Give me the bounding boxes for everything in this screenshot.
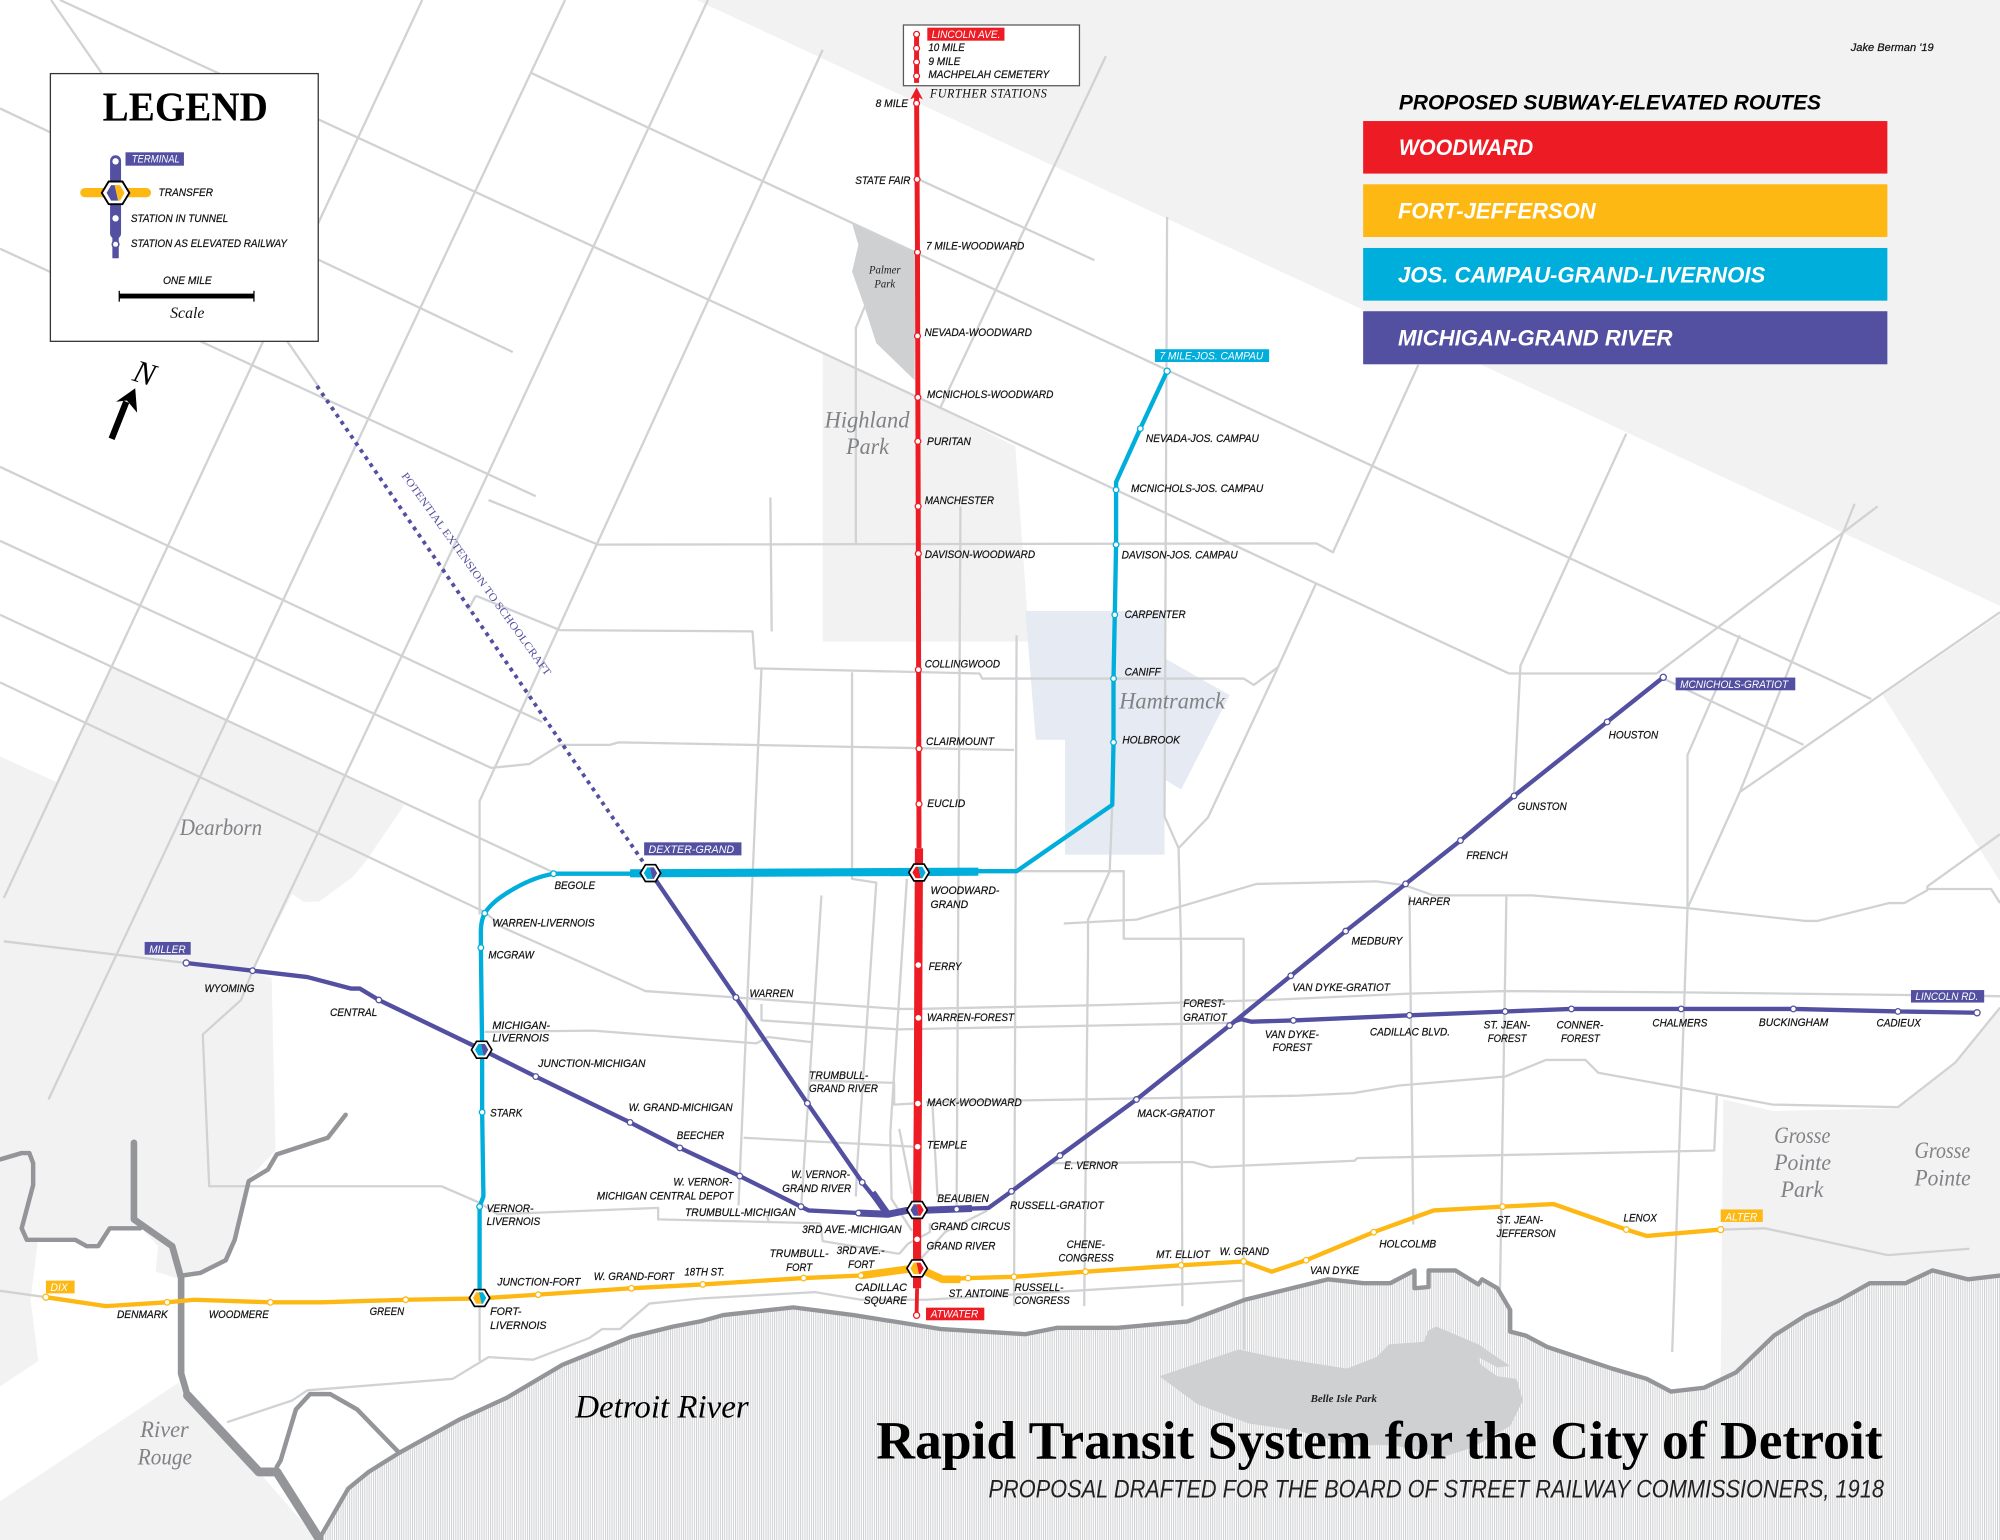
route key: Michigan-Grand River: [1363, 311, 1887, 364]
label: Russell-Congress: CONGRESS: [1015, 1295, 1070, 1307]
label: Conner-Forest: FOREST: [1561, 1033, 1601, 1045]
label: Medbury: MEDBURY: [1352, 936, 1404, 948]
label: 3rd Ave.-Fort: 3RD AVE.-: [837, 1245, 885, 1257]
label: Van Dyke-Forest: FOREST: [1273, 1042, 1312, 1054]
label: Harper: HARPER: [1408, 896, 1450, 908]
inset: further Woodward stations: MACHPELAH CEMETERY: [928, 69, 1050, 81]
label: McNichols-Woodward: MCNICHOLS-WOODWARD: [927, 389, 1053, 401]
legend text: transfer: TRANSFER: [159, 187, 213, 199]
inset: further Woodward stations: 10 MILE: [928, 42, 965, 54]
region: outside city to the northeast: [696, 0, 2000, 606]
tag: McNichols-Gratiot: MCNICHOLS-GRATIOT: [1680, 679, 1789, 691]
label: Cadillac Square: SQUARE: [864, 1295, 907, 1307]
legend text: station as elevated railway: STATION AS ELEVATED RAILWAY: [131, 238, 288, 250]
label: Van Dyke-Forest: [1265, 1029, 1319, 1054]
label: Central: CENTRAL: [330, 1007, 377, 1019]
inset: further Woodward stations: 9 MILE: [928, 56, 961, 68]
legend symbol: sample lines and transfer: [85, 158, 146, 258]
label: Stark: STARK: [490, 1108, 523, 1120]
label: Chene-Congress: [1059, 1239, 1114, 1265]
label: Temple: TEMPLE: [927, 1140, 967, 1152]
label: Woodmere: WOODMERE: [209, 1309, 269, 1321]
tag: Atwater: ATWATER: [930, 1309, 978, 1321]
label: Holbrook: HOLBROOK: [1122, 735, 1181, 747]
label: Holcolmb: HOLCOLMB: [1379, 1239, 1437, 1251]
label: 3rd Ave.-Fort: [837, 1245, 885, 1271]
label: State Fair: STATE FAIR: [855, 175, 910, 187]
place: River Rouge: River: [139, 1417, 189, 1442]
route key: Fort-Jefferson: [1363, 184, 1887, 237]
label: Puritan: PURITAN: [927, 436, 972, 448]
label: Forest-Gratiot: GRATIOT: [1183, 1012, 1228, 1024]
label: Trumbull-Michigan: TRUMBULL-MICHIGAN: [685, 1207, 796, 1219]
transfer: Michigan-Livernois: [471, 1041, 492, 1058]
label: Cadillac Square: CADILLAC: [855, 1282, 908, 1294]
label: Michigan-Livernois: LIVERNOIS: [492, 1032, 549, 1044]
region: far east wedge: [1883, 615, 2000, 881]
label: Forest-Gratiot: [1183, 998, 1228, 1024]
region: River Rouge: [0, 1383, 319, 1540]
label: W. Vernor-Michigan Central Depot: [597, 1177, 734, 1203]
place: Grosse Pointe Park: Grosse: [1774, 1123, 1830, 1148]
place: Grosse Pointe Park: [1773, 1123, 1831, 1202]
label: 18th St.: 18TH ST.: [684, 1267, 725, 1279]
label: E. Vernor: E. VERNOR: [1064, 1160, 1118, 1172]
label: Van Dyke-Gratiot: VAN DYKE-GRATIOT: [1292, 982, 1391, 994]
region: Dearborn: [0, 666, 404, 1386]
label: Mack-Gratiot: MACK-GRATIOT: [1137, 1108, 1215, 1120]
transfer: Beaubien: [907, 1202, 927, 1218]
route: Michigan-Grand River line: [183, 674, 1980, 1216]
label: Conner-Forest: [1557, 1020, 1603, 1045]
label: W. Grand: W. GRAND: [1220, 1246, 1269, 1258]
label: Vernor-Livernois: [487, 1203, 540, 1228]
place: Highland Park: Park: [845, 434, 890, 459]
route key: Jos. Campau-Grand-Livernois: JOS. CAMPAU-GRAND-LIVERNOIS: [1398, 262, 1765, 287]
legend text: scale: Scale: [170, 305, 205, 322]
station labels: Michigan-Grand River line: [145, 678, 1984, 1236]
label: Mack-Woodward: MACK-WOODWARD: [927, 1097, 1022, 1109]
waterways: shoreline and rivers: [0, 1115, 2000, 1540]
place: River Rouge: Rouge: [137, 1444, 192, 1469]
legend text: one mile: ONE MILE: [163, 275, 212, 287]
route: potential extension dotted line: [317, 386, 645, 865]
label: Warren: WARREN: [749, 988, 794, 1000]
route: Woodward line: [910, 87, 923, 1318]
label: Trumbull-Fort: FORT: [786, 1262, 813, 1274]
label: St. Antoine: ST. ANTOINE: [949, 1288, 1009, 1300]
label: Junction-Michigan: JUNCTION-MICHIGAN: [537, 1058, 646, 1070]
label: W. Vernor-Grand River: GRAND RIVER: [782, 1183, 851, 1195]
subtitle: PROPOSAL DRAFTED FOR THE BOARD OF STREET RAILWAY COMMISSIONERS, 1918: [989, 1475, 1884, 1503]
region: Grosse Pointe: [1721, 1008, 2000, 1384]
place: Highland Park: [824, 407, 910, 459]
label: 7 Mile-Woodward: 7 MILE-WOODWARD: [926, 241, 1024, 253]
label: Cadieux: CADIEUX: [1877, 1018, 1922, 1030]
label: French: FRENCH: [1466, 850, 1508, 862]
label: Woodward-Grand: [930, 885, 1000, 911]
inset: further Woodward stations: LINCOLN AVE.: [932, 29, 1001, 41]
label: Manchester: MANCHESTER: [925, 495, 994, 507]
label: W. Vernor-Grand River: [782, 1169, 851, 1195]
place: Palmer Park: [868, 265, 901, 291]
label: Collingwood: COLLINGWOOD: [925, 658, 1000, 670]
tag: 7 Mile-Jos. Campau: 7 MILE-JOS. CAMPAU: [1159, 351, 1264, 363]
region: Hamtramck: [1026, 611, 1230, 855]
label: Van Dyke: VAN DYKE: [1310, 1265, 1359, 1277]
label: Michigan-Livernois: [492, 1020, 550, 1044]
label: Warren-Livernois: WARREN-LIVERNOIS: [492, 918, 595, 930]
tag: Alter: ALTER: [1724, 1211, 1757, 1223]
label: Beaubien: BEAUBIEN: [937, 1193, 990, 1205]
label: Forest-Gratiot: FOREST-: [1183, 998, 1225, 1010]
station labels: Woodward line: [855, 98, 1053, 1321]
note: further stations: FURTHER STATIONS: [929, 87, 1047, 101]
title: Rapid Transit System for the City of Detroit: [876, 1410, 1883, 1470]
island: Belle Isle Park: [1159, 1327, 1523, 1458]
label: Junction-Fort: JUNCTION-FORT: [496, 1277, 581, 1289]
label: McNichols-Jos. Campau: MCNICHOLS-JOS. CAMPAU: [1131, 483, 1264, 495]
label: Chalmers: CHALMERS: [1652, 1018, 1708, 1030]
credit: Jake Berman '19: [1850, 42, 1934, 54]
place: River Rouge: [137, 1417, 192, 1469]
label: Conner-Forest: CONNER-: [1557, 1020, 1603, 1032]
label: Green: GREEN: [370, 1306, 405, 1318]
label: Vernor-Livernois: LIVERNOIS: [487, 1216, 540, 1228]
label: Nevada-Woodward: NEVADA-WOODWARD: [924, 327, 1032, 339]
label: Chene-Congress: CONGRESS: [1059, 1253, 1114, 1265]
inset: further Woodward stations: [903, 25, 1079, 86]
label: Trumbull-Fort: [770, 1248, 829, 1274]
label: Trumbull-Fort: TRUMBULL-: [770, 1248, 829, 1260]
label: W. Vernor-Michigan Central Depot: MICHIGAN CENTRAL DEPOT: [597, 1191, 734, 1203]
label: St. Jean-Forest: ST. JEAN-: [1484, 1020, 1530, 1032]
label: Fort-Livernois: LIVERNOIS: [490, 1320, 547, 1332]
label: Davison-Jos. Campau: DAVISON-JOS. CAMPAU: [1122, 550, 1238, 562]
transfer: Cadillac Square: [907, 1260, 927, 1277]
label: Michigan-Livernois: MICHIGAN-: [492, 1020, 550, 1032]
label: St. Jean-Jefferson: JEFFERSON: [1496, 1228, 1556, 1240]
label: Trumbull-Grand River: GRAND RIVER: [809, 1083, 878, 1095]
label: Begole: BEGOLE: [554, 880, 595, 892]
place: Palmer Park: Park: [873, 279, 896, 291]
label: Warren-Forest: WARREN-FOREST: [927, 1012, 1015, 1024]
label: St. Jean-Jefferson: ST. JEAN-: [1497, 1215, 1543, 1227]
label: Grand River: GRAND RIVER: [927, 1241, 995, 1253]
label: Caniff: CANIFF: [1125, 667, 1162, 679]
route key: Jos. Campau-Grand-Livernois: [1363, 248, 1887, 301]
north arrow: N: [128, 353, 162, 394]
label: McGraw: MCGRAW: [488, 950, 535, 962]
place: Highland Park: Highland: [824, 407, 910, 432]
tag: Dix: DIX: [50, 1282, 69, 1294]
tag: Miller: MILLER: [149, 944, 186, 956]
label: Vernor-Livernois: VERNOR-: [487, 1203, 534, 1215]
station labels: Jos. Campau-Grand-Livernois line: [487, 349, 1269, 1228]
place: Hamtramck: Hamtramck: [1118, 688, 1226, 713]
label: Russell-Congress: [1015, 1282, 1070, 1307]
label: Clairmount: CLAIRMOUNT: [926, 736, 995, 748]
place: Grosse Pointe: [1914, 1138, 1971, 1190]
tag: Dexter-Grand: DEXTER-GRAND: [648, 844, 734, 856]
place: Grosse Pointe Park: Park: [1780, 1177, 1824, 1202]
label: W. Grand-Fort: W. GRAND-FORT: [594, 1271, 675, 1283]
label: St. Jean-Forest: [1484, 1020, 1530, 1045]
river: Detroit River hatched water: [319, 1270, 2000, 1540]
legend tag: terminal: TERMINAL: [132, 154, 180, 166]
label: Houston: HOUSTON: [1609, 730, 1659, 742]
label: Grand Circus: GRAND CIRCUS: [931, 1221, 1011, 1233]
route key: Fort-Jefferson: FORT-JEFFERSON: [1398, 198, 1597, 223]
label: 3rd Ave.-Fort: FORT: [848, 1259, 875, 1271]
label: W. Grand-Michigan: W. GRAND-MICHIGAN: [629, 1102, 733, 1114]
route key: Michigan-Grand River: MICHIGAN-GRAND RIVER: [1398, 325, 1673, 350]
route: Jos. Campau-Grand-Livernois line: [477, 368, 1170, 1298]
label: Carpenter: CARPENTER: [1125, 609, 1186, 621]
label: St. Jean-Forest: FOREST: [1488, 1033, 1527, 1045]
label: potential extension to Schoolcraft: POTENTIAL EXTENSION TO SCHOOLCRAFT: [399, 471, 553, 678]
label: Fort-Livernois: [490, 1306, 547, 1332]
label: Euclid: EUCLID: [927, 798, 965, 810]
transfer: Woodward-Grand: [909, 864, 929, 881]
label: Buckingham: BUCKINGHAM: [1759, 1017, 1829, 1029]
label: 3rd Ave.-Michigan: 3RD AVE.-MICHIGAN: [802, 1224, 902, 1236]
label: Gunston: GUNSTON: [1518, 801, 1567, 813]
label: Nevada-Jos. Campau: NEVADA-JOS. CAMPAU: [1146, 433, 1260, 445]
label: Fort-Livernois: FORT-: [490, 1306, 522, 1318]
label: Lenox: LENOX: [1623, 1213, 1658, 1225]
label: Van Dyke-Forest: VAN DYKE-: [1265, 1029, 1319, 1041]
place: Grosse Pointe Park: Pointe: [1773, 1150, 1831, 1175]
heading: proposed routes: PROPOSED SUBWAY-ELEVATED ROUTES: [1399, 92, 1821, 115]
legend heading: LEGEND: [103, 85, 268, 130]
legend text: station in tunnel: STATION IN TUNNEL: [131, 213, 228, 225]
place: Palmer Park: Palmer: [868, 265, 901, 277]
label: Trumbull-Grand River: [809, 1070, 878, 1095]
label: Russell-Congress: RUSSELL-: [1015, 1282, 1064, 1294]
scale bar: [119, 291, 255, 302]
label: Russell-Gratiot: RUSSELL-GRATIOT: [1010, 1200, 1105, 1212]
label: Wyoming: WYOMING: [204, 983, 255, 995]
north arrow: [112, 353, 162, 439]
label: St. Jean-Jefferson: [1496, 1215, 1556, 1240]
label: Cadillac Square: [855, 1282, 908, 1307]
station labels: Fort-Jefferson line: [46, 1209, 1763, 1332]
label: Mt. Elliot: MT. ELLIOT: [1156, 1249, 1211, 1261]
label: Cadillac Blvd.: CADILLAC BLVD.: [1370, 1027, 1450, 1039]
label: Trumbull-Grand River: TRUMBULL-: [809, 1070, 869, 1082]
transfer: Fort-Livernois: [469, 1290, 490, 1306]
region: Palmer Park: [852, 223, 916, 380]
transfer: Dexter-Grand: [640, 865, 661, 882]
region: Highland Park: [823, 353, 1029, 642]
label: Woodward-Grand: GRAND: [930, 899, 968, 911]
label: Ferry: FERRY: [929, 961, 963, 973]
tag: Dix: [46, 1281, 75, 1294]
label: Davison-Woodward: DAVISON-WOODWARD: [925, 549, 1035, 561]
label: Beecher: BEECHER: [677, 1130, 724, 1142]
label: W. Vernor-Grand River: W. VERNOR-: [791, 1169, 850, 1181]
place: Grosse Pointe: Pointe: [1914, 1165, 1971, 1190]
label: 8 Mile: 8 MILE: [876, 98, 908, 110]
label: Chene-Congress: CHENE-: [1067, 1239, 1105, 1251]
tag: Lincoln Rd.: LINCOLN RD.: [1915, 991, 1978, 1003]
place: Belle Isle Park: Belle Isle Park: [1310, 1393, 1377, 1405]
place: Dearborn: Dearborn: [179, 815, 262, 840]
label: Woodward-Grand: WOODWARD-: [930, 885, 1000, 897]
route: Fort-Jefferson line: [43, 1204, 1724, 1306]
place: Grosse Pointe: Grosse: [1915, 1138, 1970, 1163]
route key: Woodward: WOODWARD: [1399, 135, 1533, 160]
label: W. Vernor-Michigan Central Depot: W. VERNOR-: [673, 1177, 732, 1189]
place: Detroit River: Detroit River: [574, 1389, 749, 1426]
route key: Woodward: [1363, 121, 1887, 174]
legend panel: [50, 74, 318, 341]
label: Denmark: DENMARK: [117, 1309, 169, 1321]
